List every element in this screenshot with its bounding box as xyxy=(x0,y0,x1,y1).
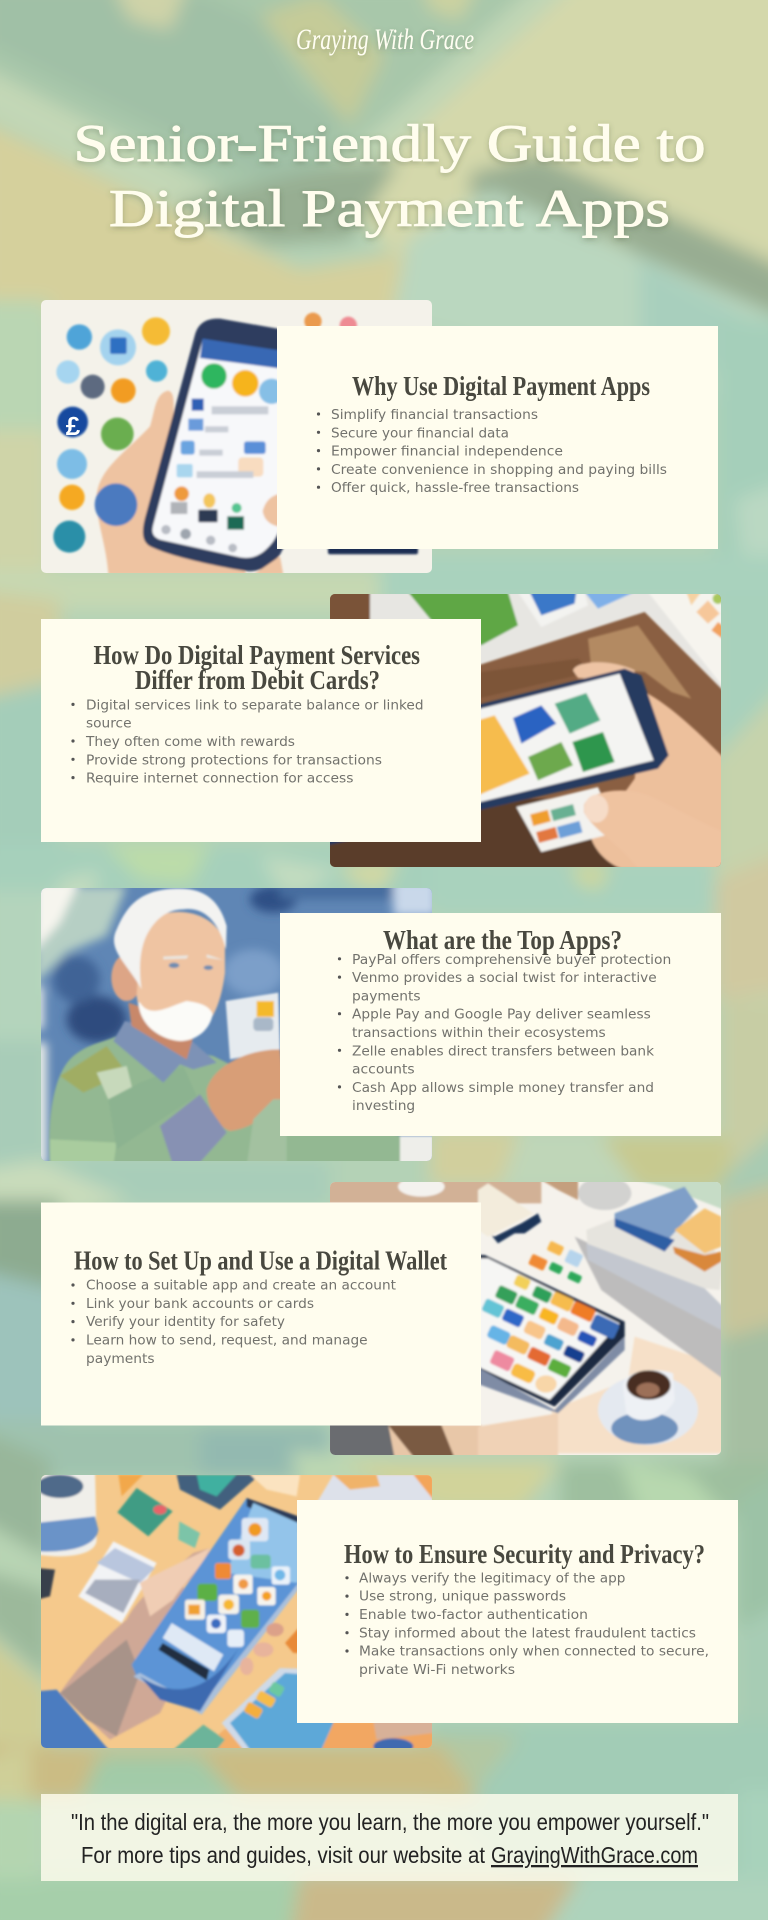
bullet list xyxy=(71,1279,396,1367)
heading: How to Ensure Security and Privacy? xyxy=(344,1539,705,1569)
bullet list: Apple Pay and Google Pay deliver seamless xyxy=(352,1008,651,1023)
bullet list: Offer quick, hassle-free transactions xyxy=(331,481,579,496)
bullet list xyxy=(71,698,424,787)
bullet list: Verify your identity for safety xyxy=(86,1315,285,1330)
bullet list: Learn how to send, request, and manage xyxy=(86,1334,368,1348)
illustration: hand holding phone with app icons xyxy=(41,300,432,575)
panel: why use digital payment apps xyxy=(41,300,718,575)
panel: digital wallet setup xyxy=(41,1177,725,1458)
bullet list: private Wi-Fi networks xyxy=(359,1663,515,1678)
title xyxy=(74,115,705,238)
card: digital wallet setup xyxy=(41,1202,481,1426)
bullet list: Empower financial independence xyxy=(331,445,563,460)
bullet list: source xyxy=(86,717,132,732)
bullet list: Provide strong protections for transactions xyxy=(86,753,382,768)
brand logo: Graying With Grace xyxy=(296,23,474,56)
bullet list: Zelle enables direct transfers between bank xyxy=(352,1044,654,1059)
bullet list: investing xyxy=(352,1099,415,1114)
bullet list: Enable two-factor authentication xyxy=(359,1608,588,1623)
icon: pound coin: £ xyxy=(66,411,81,441)
bullet list: Require internet connection for access xyxy=(86,772,354,787)
card: debit card differences xyxy=(41,619,481,842)
bullet list: transactions within their ecosystems xyxy=(352,1026,606,1041)
heading: What are the Top Apps? xyxy=(383,925,622,955)
bullet list: Use strong, unique passwords xyxy=(359,1590,566,1605)
bullet list xyxy=(338,953,671,1114)
panel: top apps xyxy=(33,879,721,1166)
title: Senior-Friendly Guide to xyxy=(74,115,705,173)
bullet list: Digital services link to separate balance or linked xyxy=(86,698,424,713)
illustration: phone, coffee and books on a desk xyxy=(328,1177,725,1458)
bullet list: Create convenience in shopping and paying bills xyxy=(331,463,667,478)
heading: How Do Digital Payment Services xyxy=(94,640,420,670)
bullet list: Choose a suitable app and create an account xyxy=(86,1279,396,1294)
bullet list: PayPal offers comprehensive buyer protection xyxy=(352,953,671,968)
bullet list: Stay informed about the latest fraudulent tactics xyxy=(359,1626,696,1641)
illustration: hand with phone over orange desk xyxy=(37,1470,433,1754)
bullet list: Venmo provides a social twist for interactive xyxy=(352,971,657,986)
bullet list: Always verify the legitimacy of the app xyxy=(359,1571,625,1586)
bullet list: Make transactions only when connected to secure, xyxy=(359,1645,709,1660)
bullet list: payments xyxy=(86,1352,155,1367)
card: security and privacy xyxy=(297,1500,738,1723)
heading: Why Use Digital Payment Apps xyxy=(352,371,650,401)
bullet list xyxy=(317,408,667,496)
callout: closing quote and website xyxy=(41,1794,738,1881)
bullet list: payments xyxy=(352,989,421,1004)
card: why use digital payment apps xyxy=(277,326,718,549)
bullet list: Link your bank accounts or cards xyxy=(86,1297,314,1312)
heading: How to Set Up and Use a Digital Wallet xyxy=(74,1246,447,1276)
bullet list xyxy=(345,1571,709,1678)
panel: security and privacy xyxy=(37,1470,738,1754)
bullet list: Secure your financial data xyxy=(331,426,509,441)
callout: closing quote and website: GrayingWithGrace.com xyxy=(491,1842,698,1868)
illustration: senior man holding a card xyxy=(33,879,437,1166)
callout: closing quote and website: For more tips and guides, visit our website at xyxy=(81,1842,486,1868)
card: top apps xyxy=(280,913,721,1136)
bullet list: Simplify financial transactions xyxy=(331,408,538,423)
panel: debit card differences xyxy=(41,592,725,872)
bullet list: Cash App allows simple money transfer and xyxy=(352,1081,654,1096)
title: Digital Payment Apps xyxy=(109,180,670,238)
bullet list: They often come with rewards xyxy=(85,735,295,750)
heading xyxy=(94,640,420,695)
illustration: phone held over table xyxy=(328,592,725,872)
bullet list: accounts xyxy=(352,1063,415,1078)
heading: Differ from Debit Cards? xyxy=(135,665,380,695)
